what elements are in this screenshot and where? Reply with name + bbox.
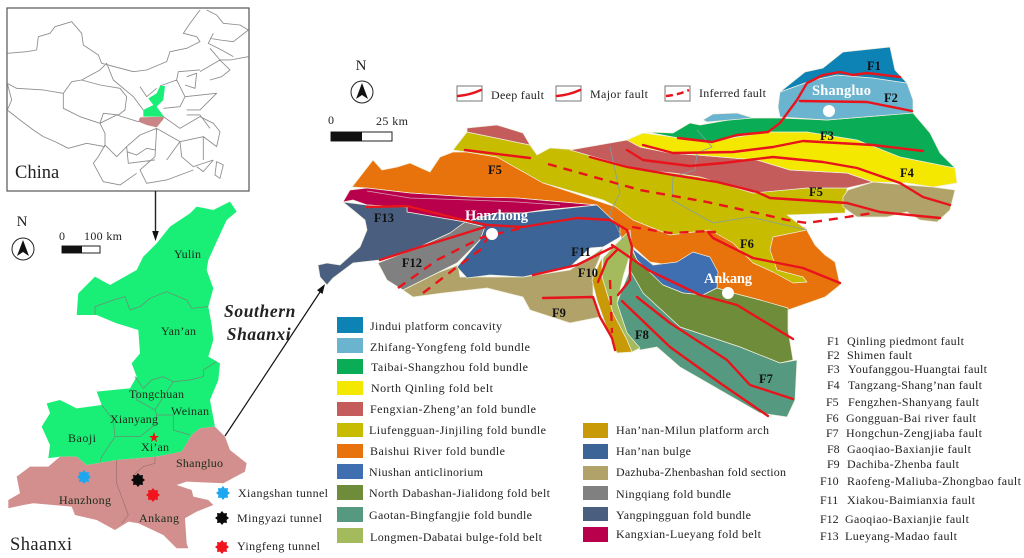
fault list: Xiakou-Baimianxia fault (847, 493, 976, 507)
region: Han'nan bulge (457, 205, 620, 278)
Shaanxi city labels: Xianyang (110, 412, 158, 426)
Shaanxi city labels: Ankang (139, 511, 179, 525)
panel: China locator map (7, 8, 249, 191)
fault lines (367, 72, 950, 416)
legend: fold units column 1: Liufengguan-Jinjiling fold bundle (369, 423, 546, 437)
scale bar: Southern Shaanxi (328, 113, 409, 141)
region: Zhifang-Yongfeng (778, 75, 913, 120)
Shaanxi highlight green (143, 86, 165, 117)
legend: fold units column 2: Yangpingguan fold bundle (616, 508, 751, 522)
fault labels: F12 (402, 256, 422, 270)
city: Shangluo: Shangluo (812, 83, 871, 99)
region: Dazhuba west (403, 248, 603, 323)
fault list: Raofeng-Maliuba-Zhongbao fault (847, 474, 1022, 488)
legend: fold units column 2: Ningqiang fold bundle (616, 487, 731, 501)
panel: Shaanxi map (8, 202, 247, 555)
fault list: F3 (827, 362, 840, 376)
legend: fold units column 1: Gaotan-Bingfangjie fold bundle (369, 508, 532, 522)
fault list: Shimen fault (847, 348, 913, 362)
Major fault key (556, 86, 649, 101)
region: Taibai-Shangzhou green (647, 113, 955, 168)
legend: fold units column 1: North Qinling fold belt (371, 381, 494, 395)
legend: fold units column 1: North Dabashan-Jialidong fold belt (369, 486, 551, 500)
Xi'an star (149, 432, 159, 442)
fault list: Gaoqiao-Baxianjie fault (847, 442, 972, 456)
tunnel legend (215, 486, 329, 554)
fault list: F11 (820, 493, 838, 507)
scale bar: Shaanxi (59, 229, 123, 253)
fault list: F5 (826, 395, 839, 409)
region: Gaotan (617, 270, 797, 417)
fault list: F12 (820, 512, 839, 526)
fault list: Lueyang-Madao fault (845, 529, 958, 543)
fault list: Youfanggou-Huangtai fault (848, 362, 988, 376)
region: Liufengguan-Jinjiling (453, 132, 847, 283)
fault list: F1 (827, 334, 840, 348)
legend: fold units column 1: Niushan anticlinorium (369, 465, 484, 479)
fault list: Qinling piedmont fault (847, 334, 965, 348)
fault labels: F8 (635, 328, 649, 342)
fault list (820, 334, 1022, 543)
Southern Shaanxi heading: Shaanxi (227, 324, 291, 344)
fault list: F8 (827, 442, 840, 456)
legend: fold units column 2 (583, 423, 786, 542)
fault labels: F13 (374, 211, 394, 225)
Shaanxi label: Shaanxi (10, 535, 72, 555)
fault list: F6 (826, 411, 839, 425)
Southern Shaanxi highlight (138, 117, 164, 127)
tunnel legend: Yingfeng tunnel (237, 539, 321, 553)
fault list: F13 (820, 529, 839, 543)
panel: geological fold map (318, 47, 957, 417)
Shaanxi city labels: Hanzhong (59, 493, 111, 507)
China label: China (15, 163, 59, 183)
Inferred fault key: Inferred fault (699, 86, 767, 100)
region: North Qinling yellow (627, 132, 957, 187)
region: Longmen (602, 230, 640, 352)
arrow: Shaanxi to Southern Shaanxi (225, 284, 325, 436)
fault labels (374, 59, 915, 386)
north arrow: Southern Shaanxi: N (356, 58, 367, 74)
fault labels: F7 (759, 372, 773, 386)
fault list: Dachiba-Zhenba fault (847, 457, 960, 471)
legend: fold units column 1: Taibai-Shangzhou fold bundle (371, 360, 528, 374)
fault labels: F3 (820, 129, 834, 143)
fault labels: F5 (809, 185, 823, 199)
Southern Shaanxi heading: Southern (224, 301, 296, 321)
city: Ankang: Ankang (704, 271, 753, 287)
scale bar: Shaanxi: 0 (59, 229, 65, 243)
legend: fold units column 2: Kangxian-Lueyang fold belt (616, 527, 762, 541)
scale bar: Southern Shaanxi: 25 km (376, 114, 409, 128)
legend: fold units column 1: Baishui River fold bundle (370, 444, 505, 458)
tunnel legend: Mingyazi tunnel (237, 511, 323, 525)
fault labels: F4 (900, 166, 915, 180)
Deep fault key: Deep fault (491, 88, 545, 102)
north arrow: Southern Shaanxi (351, 58, 373, 103)
southern Shaanxi pink (8, 427, 247, 548)
north arrow: Shaanxi (12, 214, 34, 260)
fault list: Gongguan-Bai river fault (846, 411, 977, 425)
fault labels: F11 (571, 245, 591, 259)
Shaanxi city labels: Xi’an (141, 440, 169, 454)
Shaanxi city labels: Weinan (171, 404, 209, 418)
fault list: Tangzang-Shang’nan fault (848, 378, 983, 392)
fault list: F4 (827, 378, 840, 392)
region: Yangpingguan (318, 202, 465, 285)
fault list: Hongchun-Zengjiaba fault (846, 426, 983, 440)
legend: fold units column 2: Han’nan bulge (616, 444, 691, 458)
region: Fengxian-Zheng'an north (467, 125, 530, 145)
arrow: China to Shaanxi (152, 191, 159, 241)
region: Zhifang-Yongfeng small (703, 113, 753, 122)
scale bar: Shaanxi: 100 km (84, 229, 123, 243)
rivers and boundaries (610, 130, 807, 240)
Deep fault key (457, 86, 545, 102)
China province outlines (7, 10, 248, 185)
Inferred fault key (665, 86, 767, 101)
legend: fold units column 1 (337, 317, 551, 544)
region: Fengxian-Zheng'an main (570, 140, 873, 193)
region: North Dabashan (630, 250, 793, 363)
Shaanxi city labels: Yan’an (161, 324, 196, 338)
fault labels: F2 (884, 91, 898, 105)
region: Jindui (780, 47, 907, 92)
legend: fold units column 1: Zhifang-Yongfeng fold bundle (370, 340, 530, 354)
region: Dazhuba east (843, 182, 955, 222)
region: Han'nan-Milun (592, 257, 632, 353)
tunnel markers on map (77, 470, 160, 502)
legend: fold units column 1: Jindui platform concavity (370, 319, 502, 333)
fault list: F7 (826, 426, 839, 440)
Shaanxi city labels: Tongchuan (129, 387, 184, 401)
tunnel legend: Xiangshan tunnel (238, 486, 329, 500)
city: Hanzhong: Hanzhong (465, 208, 529, 224)
north arrow: Shaanxi: N (17, 214, 28, 230)
region: Ningqiang (378, 222, 485, 290)
legend: fold units column 1: Longmen-Dabatai bulge-fold belt (370, 530, 543, 544)
city: Hanzhong (465, 208, 529, 240)
city: Ankang (704, 271, 753, 299)
north Shaanxi green (42, 202, 237, 465)
fault list: Gaoqiao-Baxianjie fault (845, 512, 970, 526)
Shaanxi city labels: Shangluo (176, 456, 223, 470)
scale bar: Southern Shaanxi: 0 (328, 113, 334, 127)
fault list: Fengzhen-Shanyang fault (848, 395, 980, 409)
Shaanxi city labels: Yulin (174, 247, 201, 261)
Shaanxi city labels: Baoji (68, 431, 97, 445)
region: Kangxian-Lueyang (343, 188, 597, 222)
Major fault key: Major fault (590, 87, 649, 101)
region: Baishui River orange (352, 152, 840, 310)
fault labels: F9 (552, 306, 566, 320)
region: Niushan (632, 248, 718, 295)
legend: fold units column 1: Fengxian-Zheng’an fold bundle (370, 402, 536, 416)
fault type legend (457, 86, 767, 102)
fault labels: F6 (740, 237, 754, 251)
fault list: F10 (820, 474, 839, 488)
Southern Shaanxi heading (224, 301, 296, 344)
fault labels: F1 (867, 59, 881, 73)
fault list: F9 (827, 457, 840, 471)
legend: fold units column 2: Dazhuba-Zhenbashan fold section (616, 465, 786, 479)
fault labels: F5 (488, 163, 502, 177)
city: Shangluo (812, 83, 871, 117)
Shaanxi city labels (59, 247, 223, 525)
fault list: F2 (827, 348, 840, 362)
fault labels: F10 (578, 266, 598, 280)
legend: fold units column 2: Han’nan-Milun platform arch (616, 423, 769, 437)
